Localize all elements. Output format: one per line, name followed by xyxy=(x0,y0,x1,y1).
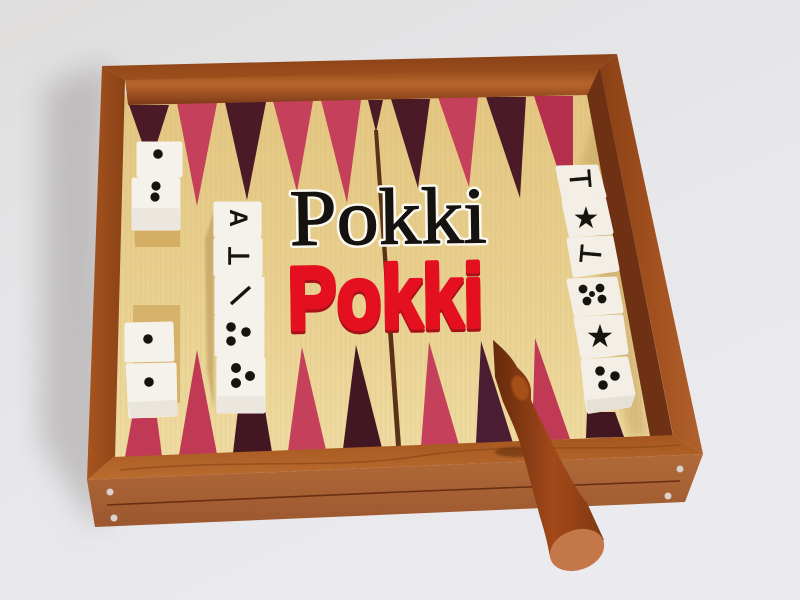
dice: left column lower xyxy=(127,324,177,418)
dice: left column upper xyxy=(132,144,180,230)
frame rails xyxy=(87,54,703,527)
die: star: ★ xyxy=(573,201,599,236)
top wall of the frame xyxy=(125,67,600,105)
red title shadow: Pokki xyxy=(287,250,484,352)
dice: right column xyxy=(558,167,635,414)
top rail xyxy=(102,54,617,80)
die: two pips xyxy=(132,180,180,230)
left rail xyxy=(87,66,125,480)
die: star xyxy=(576,317,626,357)
die: T glyph xyxy=(569,238,617,275)
stick shaft xyxy=(493,340,604,557)
top triangles xyxy=(129,96,573,206)
die: T glyph xyxy=(216,240,260,274)
shadow: centre dice column xyxy=(205,210,214,410)
panel: playing surface xyxy=(108,90,655,462)
die: one pip xyxy=(127,324,172,360)
stick end cap xyxy=(544,522,610,578)
right rail xyxy=(600,54,703,454)
dice: centre column xyxy=(216,204,265,413)
die: T glyph: T xyxy=(574,243,609,265)
die: one pip xyxy=(139,144,180,175)
stick head highlight xyxy=(508,373,532,403)
die: five pips xyxy=(569,279,621,314)
die: star xyxy=(564,201,611,236)
wooden stick xyxy=(493,340,610,578)
die: T glyph: T xyxy=(223,247,256,265)
die: slash glyph xyxy=(217,279,262,313)
red title face: Pokki xyxy=(287,247,484,349)
die: three pips, front xyxy=(583,359,635,414)
stick shadow on rail xyxy=(495,447,535,457)
bottom triangles xyxy=(125,338,624,457)
board drop shadow xyxy=(40,60,110,530)
serif title face: Pokki xyxy=(289,172,487,263)
centre divider line xyxy=(374,130,401,446)
die: T glyph xyxy=(558,167,604,198)
title: black serif Pokki xyxy=(289,172,487,263)
die: T glyph: T xyxy=(562,168,597,190)
screws xyxy=(106,466,684,522)
die: one pip, front xyxy=(127,365,177,418)
pocket: lower left xyxy=(133,305,180,403)
die: A glyph xyxy=(216,204,259,235)
title: red sans Pokki xyxy=(287,247,484,352)
pocket: upper left xyxy=(133,200,180,247)
die: three pips xyxy=(217,317,262,354)
die: three pips, front xyxy=(217,359,265,413)
front face xyxy=(87,454,703,527)
die: star: ★ xyxy=(586,317,614,355)
front face groove xyxy=(107,481,680,505)
right inner wall xyxy=(587,67,673,436)
die: A glyph: A xyxy=(224,209,252,227)
serif title outline: Pokki xyxy=(289,172,487,263)
front rail top xyxy=(87,435,703,480)
shadow: right side of surface xyxy=(580,100,648,436)
